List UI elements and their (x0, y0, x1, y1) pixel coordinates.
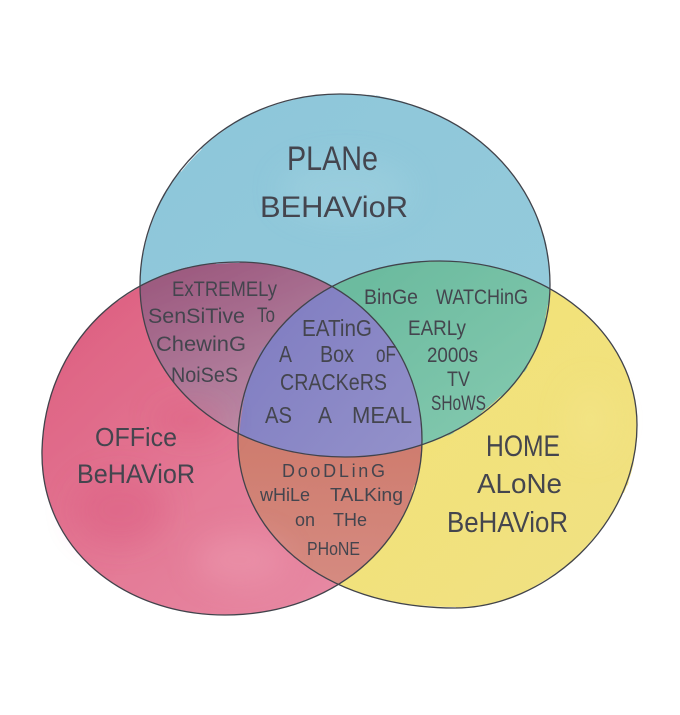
overlap: center (240, 287, 422, 456)
label: top-left overlap: ChewinG (156, 333, 246, 356)
label: center overlap: oF (376, 341, 396, 367)
label: center overlap (265, 315, 412, 428)
label: center overlap: Box (320, 341, 354, 367)
label: center overlap: A (318, 402, 333, 428)
label: center overlap: MEAL (352, 402, 412, 428)
circle fills (42, 94, 637, 615)
label: top-right overlap: TV (447, 368, 470, 391)
label: center overlap: EATinG (302, 315, 372, 341)
label: office behavior: OFFice (95, 422, 177, 452)
label: bottom overlap: on (295, 510, 315, 530)
venn diagram (41, 93, 638, 616)
label: top-right overlap: BinGe (364, 286, 418, 309)
label: top-left overlap: NoiSeS (171, 364, 238, 387)
label: plane behavior: PLANe (287, 140, 378, 178)
label: top-right overlap: WATCHinG (436, 286, 528, 309)
label: top-right overlap: 2000s (427, 344, 478, 367)
label: bottom overlap: THe (333, 510, 367, 530)
label: home alone behavior (447, 430, 568, 539)
watercolor mottling (75, 160, 612, 585)
label: home alone behavior: HOME (486, 430, 560, 463)
overlap: top and right (240, 262, 550, 446)
label: office behavior (77, 422, 195, 489)
label: bottom overlap: TALKing (330, 485, 403, 505)
label: center overlap: AS (265, 402, 292, 428)
label: home alone behavior: BeHAVioR (447, 507, 568, 539)
label: bottom overlap: wHiLe (259, 485, 310, 505)
label: bottom overlap: DooDLinG (282, 461, 385, 481)
label: center overlap: A (279, 341, 293, 367)
label: top-right overlap (364, 286, 528, 415)
overlap: left and right (239, 288, 422, 584)
label: top-left overlap (148, 278, 277, 387)
label: top-left overlap: SenSiTive (148, 305, 245, 328)
label: bottom overlap (259, 461, 403, 559)
label: center overlap: CRACKeRS (280, 369, 387, 395)
label: bottom overlap: PHoNE (307, 539, 360, 559)
label: top-left overlap: ExTREMELy (172, 278, 277, 301)
label: home alone behavior: ALoNe (477, 468, 562, 499)
label: plane behavior: BEHAVioR (260, 191, 408, 224)
label: top-right overlap: SHoWS (431, 392, 486, 415)
circle outlines (42, 94, 637, 615)
label: top-right overlap: EARLy (408, 317, 466, 340)
label: plane behavior (260, 140, 408, 224)
overlap: top and left (140, 262, 330, 435)
label: office behavior: BeHAVioR (77, 459, 195, 489)
label: top-left overlap: To (257, 304, 275, 327)
